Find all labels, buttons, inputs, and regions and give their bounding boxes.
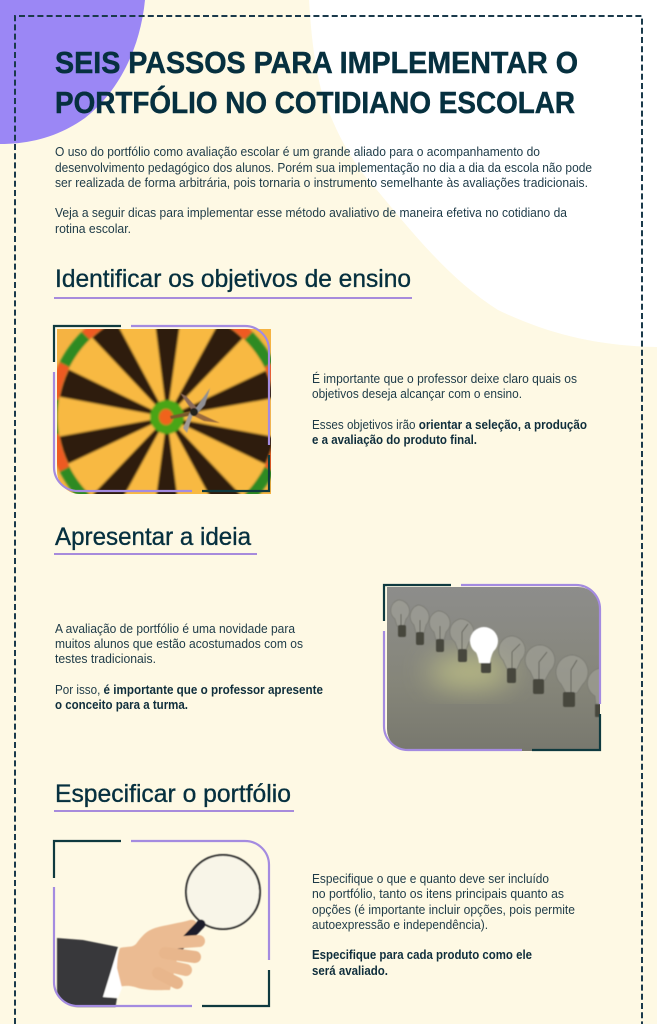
text block: apresentar: A avaliação de portfólio é uma novidade para — [55, 622, 295, 636]
frame: magnifying glass — [54, 841, 269, 1006]
intro text: desenvolvimento pedagógico dos alunos. Porém sua implementação no dia a dia da escola não pode — [55, 161, 592, 175]
text block: especificar: será avaliado. — [312, 964, 388, 978]
background purple circle — [0, 0, 145, 144]
text block: objetivos: e a avaliação do produto final. — [312, 433, 477, 447]
intro text — [55, 145, 592, 236]
text block: apresentar: o conceito para a turma. — [55, 698, 188, 712]
text block: especificar: autoexpressão e independência). — [312, 918, 488, 932]
frame: light bulbs — [384, 585, 600, 750]
magnifier handle — [179, 924, 201, 947]
heading: identificar: Identificar os objetivos de ensino — [55, 265, 411, 293]
text block: objetivos: objetivos deseja alcançar com o ensino. — [312, 387, 522, 401]
text block: objetivos — [312, 371, 587, 447]
icon: dart — [170, 388, 220, 433]
photo: hand with magnifying glass — [57, 855, 260, 1010]
text block: apresentar — [55, 622, 323, 712]
text block: especificar: no portfólio, tanto os itens principais quanto as — [312, 887, 564, 901]
fingers — [158, 941, 199, 983]
intro text: ser realizada de forma arbitrária, pois tornaria o instrumento semelhante às avaliações tradicionais. — [55, 176, 588, 190]
background white blob — [309, 0, 657, 347]
text block: especificar: Especifique para cada produto como ele — [312, 948, 532, 962]
shirt and sleeve — [57, 938, 122, 1010]
title — [55, 45, 578, 120]
text block: objetivos: Esses objetivos irão orientar a seleção, a produção — [312, 418, 587, 432]
heading: apresentar: Apresentar a ideia — [55, 523, 251, 551]
intro text: O uso do portfólio como avaliação escolar é um grande aliado para o acompanhamento do — [55, 145, 540, 159]
text block: apresentar: muitos alunos que estão acostumados com os — [55, 637, 303, 651]
intro text: Veja a seguir dicas para implementar esse método avaliativo de maneira efetiva no cotidiano da — [55, 206, 567, 220]
hand palm — [117, 920, 197, 990]
text block: apresentar: Por isso, é importante que o professor apresente — [55, 683, 323, 697]
text block: objetivos: É importante que o professor deixe claro quais os — [312, 371, 577, 386]
frame: dartboard — [54, 326, 269, 491]
intro text: rotina escolar. — [55, 222, 131, 236]
photo: dartboard — [57, 329, 271, 494]
text block: especificar — [312, 872, 575, 978]
heading: especificar: Especificar o portfólio — [55, 780, 291, 808]
title: PORTFÓLIO NO COTIDIANO ESCOLAR — [55, 84, 575, 120]
text block: apresentar: testes tradicionais. — [55, 652, 156, 666]
title: SEIS PASSOS PARA IMPLEMENTAR O — [55, 45, 578, 80]
text block: especificar: Especifique o que e quanto deve ser incluído — [312, 872, 549, 886]
photo: light bulbs — [387, 587, 616, 751]
text block: especificar: opções (é importante incluir opções, pois permite — [312, 903, 575, 917]
